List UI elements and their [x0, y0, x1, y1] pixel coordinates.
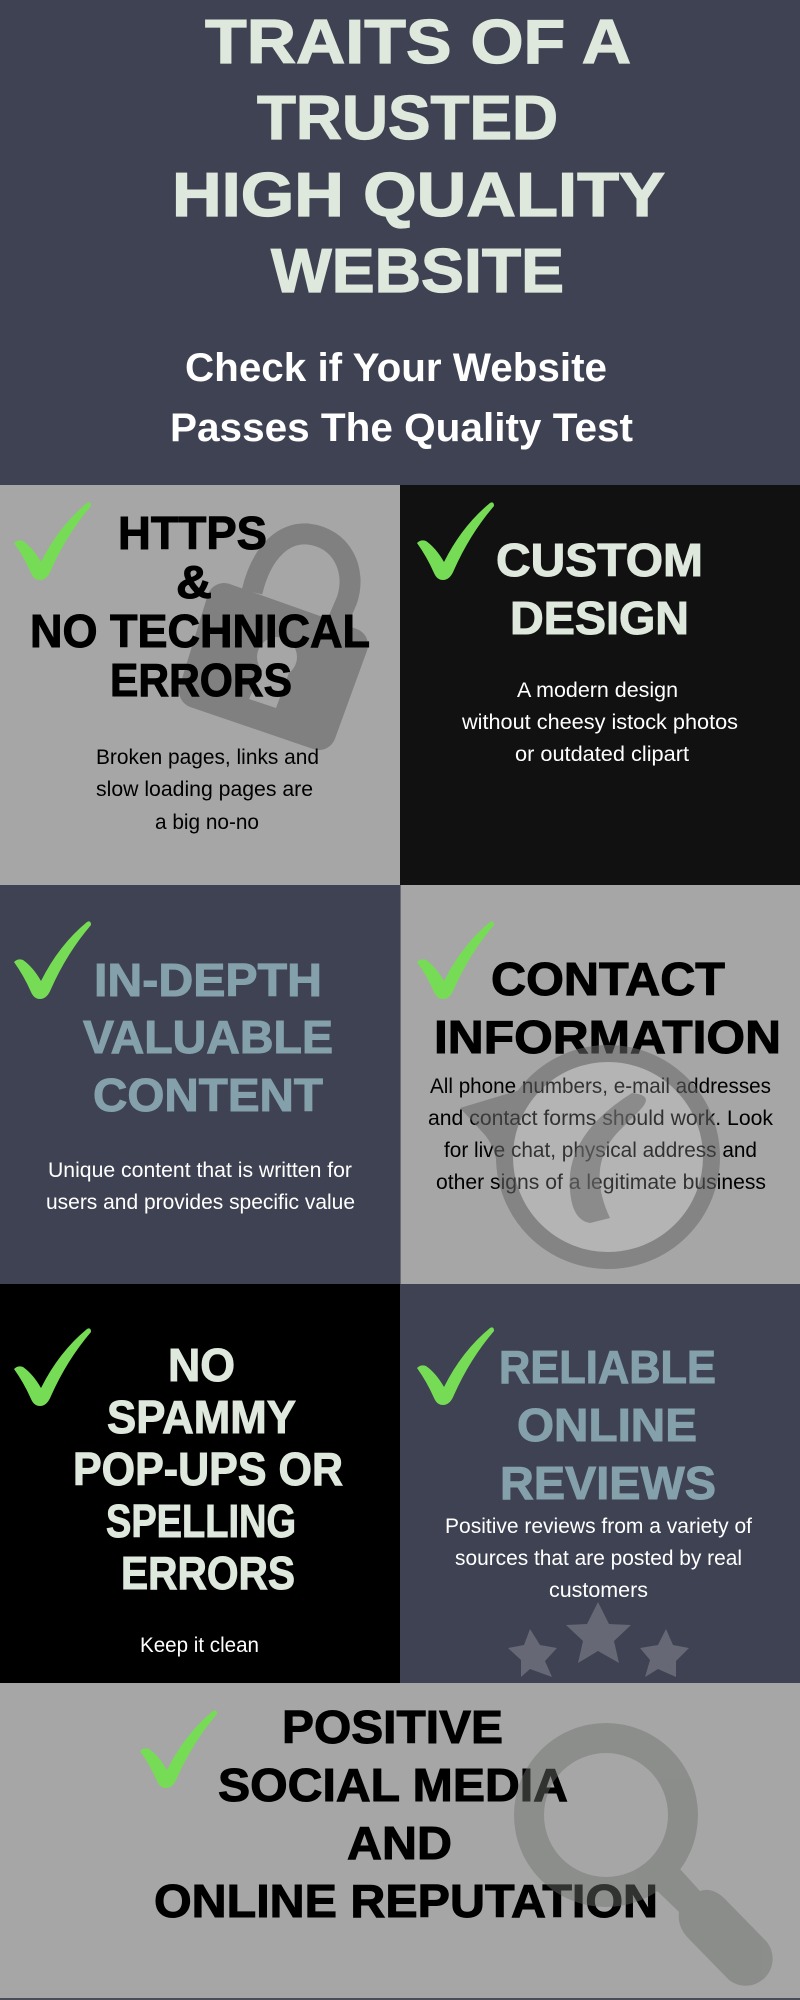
body text [445, 1515, 752, 1602]
icon: check mark [14, 1328, 91, 1406]
body text: Positive reviews from a variety of [445, 1515, 752, 1538]
heading: NO [168, 1339, 235, 1391]
heading: VALUABLE [83, 1011, 333, 1063]
title: HIGH QUALITY [172, 161, 665, 230]
title: TRUSTED [257, 84, 558, 153]
heading [434, 953, 781, 1063]
heading [496, 534, 703, 644]
heading: POP-UPS OR [73, 1443, 343, 1495]
body text: without cheesy istock photos [461, 711, 738, 734]
subtitle: Passes The Quality Test [170, 406, 633, 450]
heading: NO TECHNICAL [30, 605, 370, 657]
icon: magnifying glass [514, 1723, 773, 1986]
body text: other signs of a legitimate business [436, 1171, 766, 1194]
body text: and contact forms should work. Look [428, 1107, 773, 1130]
body text [96, 746, 319, 834]
heading: AND [347, 1817, 452, 1869]
heading: CUSTOM [496, 534, 703, 586]
heading: INFORMATION [434, 1011, 781, 1063]
icon: check mark [417, 502, 494, 580]
panel: header [0, 0, 800, 485]
heading: CONTENT [93, 1069, 323, 1121]
icon: stars [508, 1602, 689, 1677]
icon: check mark [14, 502, 91, 580]
heading: IN-DEPTH [94, 954, 322, 1006]
body text: Keep it clean [140, 1634, 259, 1657]
body text: A modern design [517, 679, 678, 702]
icon: check mark [14, 921, 91, 999]
panel: social media and reputation [0, 1683, 800, 2000]
panel: https [0, 485, 400, 885]
heading: ERRORS [121, 1547, 295, 1599]
icon: check mark [140, 1710, 217, 1788]
panel: in-depth content [0, 885, 400, 1284]
heading: RELIABLE [499, 1341, 716, 1393]
heading [83, 954, 333, 1121]
heading: ONLINE [517, 1399, 697, 1451]
body text: customers [549, 1579, 648, 1602]
body text: users and provides specific value [46, 1191, 355, 1214]
body text: slow loading pages are [96, 778, 313, 801]
panel: custom design [400, 485, 800, 885]
heading: ERRORS [110, 654, 292, 706]
heading: REVIEWS [500, 1457, 716, 1509]
heading: CONTACT [491, 953, 725, 1005]
body text: for live chat, physical address and [444, 1139, 757, 1162]
body text: All phone numbers, e-mail addresses [430, 1075, 771, 1098]
body text [461, 679, 738, 766]
subtitle [170, 346, 633, 450]
body text [428, 1075, 773, 1194]
body text: Unique content that is written for [48, 1159, 352, 1182]
heading: POSITIVE [282, 1701, 503, 1753]
heading: SPELLING [106, 1495, 296, 1547]
heading [73, 1339, 343, 1599]
heading: DESIGN [510, 592, 689, 644]
body text: or outdated clipart [515, 743, 689, 766]
heading: SOCIAL MEDIA [218, 1759, 568, 1811]
subtitle: Check if Your Website [185, 346, 607, 390]
heading: SPAMMY [107, 1391, 296, 1443]
heading [154, 1701, 658, 1927]
body text [46, 1159, 355, 1214]
panel: contact information [400, 885, 800, 1284]
icon: check mark [417, 1327, 494, 1405]
icon: phone in speech bubble [460, 1054, 712, 1260]
heading: HTTPS [118, 507, 267, 559]
heading [499, 1341, 716, 1509]
body text: a big no-no [155, 811, 259, 834]
panel: reliable online reviews [400, 1284, 800, 1683]
icon: check mark [417, 921, 494, 999]
title: TRAITS OF A [205, 8, 631, 77]
heading: ONLINE REPUTATION [154, 1875, 658, 1927]
heading [30, 507, 370, 706]
icon: padlock [196, 534, 351, 733]
heading: & [176, 556, 212, 608]
title: WEBSITE [271, 237, 564, 306]
body text: sources that are posted by real [455, 1547, 742, 1570]
title [172, 8, 665, 306]
panel: no spammy pop-ups [0, 1284, 400, 1683]
body text: Broken pages, links and [96, 746, 319, 769]
